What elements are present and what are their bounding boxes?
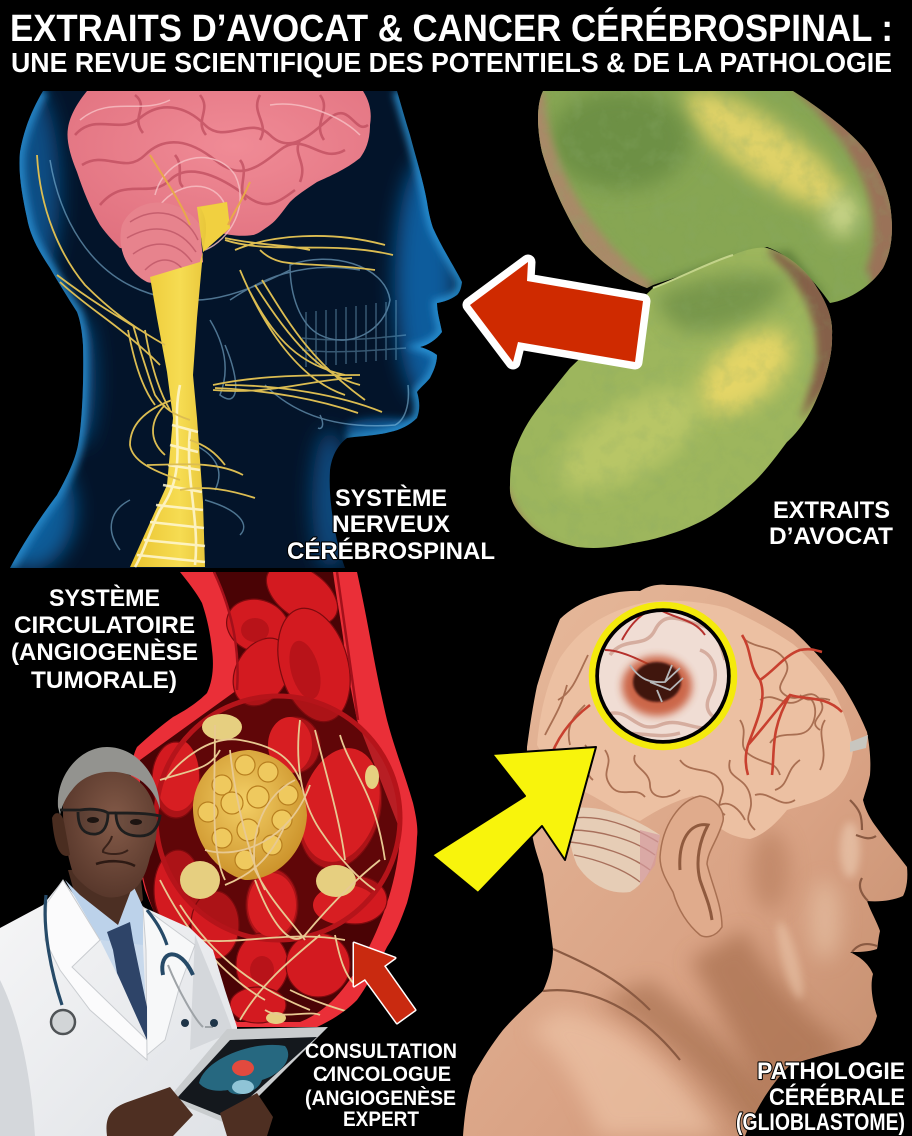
panel: avocado extracts bbox=[510, 91, 892, 548]
necktie bbox=[107, 922, 147, 1040]
tumour lens ring bbox=[155, 696, 400, 940]
skull ghost bbox=[50, 160, 408, 550]
brain folds bbox=[75, 95, 368, 205]
facial features bbox=[543, 800, 877, 1060]
exposed brain bbox=[537, 601, 853, 839]
brain bbox=[67, 91, 371, 248]
lapels bbox=[45, 880, 147, 1060]
neck bbox=[68, 868, 143, 930]
angiogenic strands bbox=[160, 720, 385, 1020]
magnifier lens: glioblastoma bbox=[597, 610, 729, 742]
label: oncologist consultation bbox=[305, 1040, 457, 1131]
nerves bbox=[37, 155, 393, 498]
tumour offshoots bbox=[180, 714, 379, 1024]
label: oncologist consultation: CONSULTATION bbox=[305, 1040, 457, 1063]
panel: brain pathology bbox=[455, 580, 912, 1136]
ear bbox=[52, 813, 70, 856]
title bbox=[10, 6, 893, 78]
label: nervous system: NERVEUX bbox=[332, 511, 450, 538]
label: avocado extracts: D’AVOCAT bbox=[769, 523, 893, 550]
stethoscope chest piece bbox=[51, 1010, 75, 1034]
label: avocado extracts bbox=[769, 497, 893, 550]
label: oncologist consultation: C⁄INCOLOGUE bbox=[313, 1063, 451, 1086]
avocado slice upper bbox=[538, 91, 892, 303]
title: UNE REVUE SCIENTIFIQUE DES POTENTIELS & DE LA PATHOLOGIE bbox=[11, 47, 892, 78]
face bbox=[63, 770, 157, 897]
vessel wall bbox=[130, 572, 417, 1027]
neck muscle fan bbox=[569, 807, 660, 893]
label: circulatory system: TUMORALE) bbox=[31, 667, 177, 694]
label: avocado extracts: EXTRAITS bbox=[773, 497, 890, 524]
cerebellum bbox=[120, 202, 203, 283]
nose and mouth bbox=[103, 836, 128, 854]
eyes bbox=[87, 817, 142, 825]
label: circulatory system: (ANGIOGENÈSE bbox=[11, 638, 198, 666]
brain stem and spinal cord bbox=[130, 202, 230, 567]
brain veins bbox=[548, 635, 842, 775]
label: circulatory system: SYSTÈME bbox=[49, 584, 160, 612]
arrow: red arrow to nervous system bbox=[470, 262, 643, 362]
arrow: small red arrow to vessel bbox=[354, 943, 415, 1023]
label: circulatory system bbox=[11, 584, 198, 694]
panel: circulatory system bbox=[130, 551, 417, 1027]
vessel lumen bbox=[140, 572, 400, 1022]
label: nervous system bbox=[287, 484, 495, 565]
label: oncologist consultation: (ANGIOGENÈSE bbox=[305, 1087, 456, 1110]
head and shoulder profile bbox=[455, 580, 912, 1136]
label: oncologist consultation: EXPERT bbox=[343, 1108, 419, 1131]
arrow: yellow arrow to brain bbox=[432, 747, 596, 893]
label: cerebral pathology bbox=[736, 1058, 905, 1136]
tablet bbox=[168, 1027, 328, 1125]
coat bbox=[0, 880, 240, 1136]
doctor portrait bbox=[0, 747, 328, 1136]
stethoscope bbox=[45, 895, 193, 1005]
label: nervous system: CÉRÉBROSPINAL bbox=[287, 537, 495, 565]
red blood cells bbox=[152, 551, 394, 1023]
head silhouette bbox=[0, 80, 470, 571]
label: cerebral pathology: PATHOLOGIE bbox=[757, 1058, 905, 1085]
tumour mass bbox=[193, 750, 307, 880]
panel: cerebrospinal nervous system bbox=[0, 80, 470, 571]
hair bbox=[58, 747, 160, 815]
glasses bbox=[60, 809, 160, 836]
avocado slice lower bbox=[510, 248, 832, 548]
label: circulatory system: CIRCULATOIRE bbox=[14, 612, 195, 639]
magnifier ring bbox=[592, 605, 734, 747]
hands bbox=[106, 1087, 193, 1136]
brain gyri bbox=[545, 640, 830, 830]
ear bbox=[660, 796, 723, 937]
shirt bbox=[65, 880, 143, 947]
label: nervous system: SYSTÈME bbox=[335, 484, 447, 512]
